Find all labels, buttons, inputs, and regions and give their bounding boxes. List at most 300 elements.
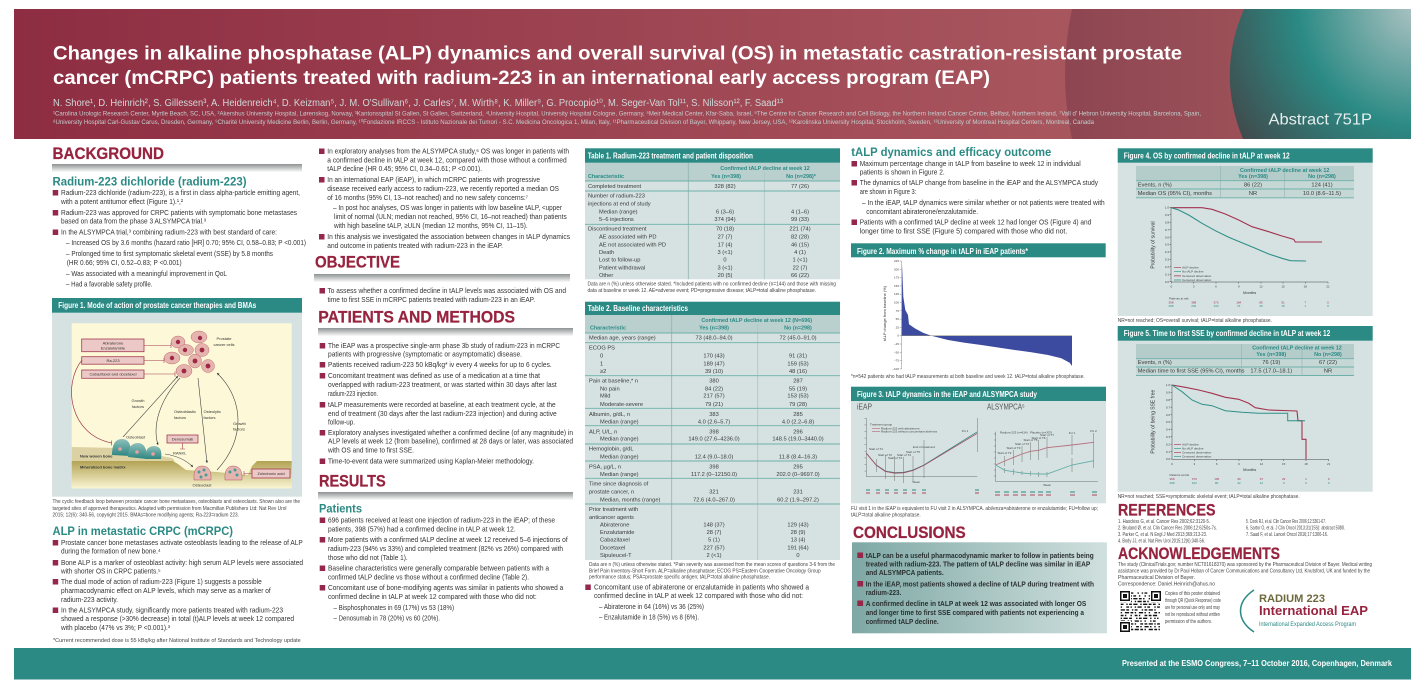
Kaplan-Meier chart: OS: 184 [1236,300,1242,304]
Kaplan-Meier chart: OS: 9 [1238,284,1240,288]
panel: table 1: injections at end of study [588,201,651,207]
section: radium-223 dichloride: – Had a favorable safety profile. [66,280,152,288]
panel: table 2: 28 (9) [791,530,806,536]
Kaplan-Meier chart: OS: 85 [1259,300,1263,304]
title [53,42,1182,89]
panel: table 2: 13 (4) [791,538,806,544]
diagram: bone and cancer feedback loop: Osteoblast [126,434,146,440]
section: tALP dynamics and efficacy outcome: Maximum percentage change in tALP from baseline to week 12 in individual [860,159,1081,168]
waterfall chart: 225 [894,259,899,263]
osteoclast cells [194,466,242,480]
Kaplan-Meier chart: OS: 0.8 [1165,220,1169,224]
diagram: bone and cancer feedback loop: factors [174,415,186,420]
section: radium-223 dichloride [52,176,306,288]
chart: iEAP: Radium-223 with abiraterone [881,426,920,430]
panel: table 2: 48 (16) [789,369,807,375]
section: radium-223 dichloride: – Increased OS by 3.6 months (hazard ratio [HR] 0.70; 95% CI, 0.58–0.83; P <0.001) [66,238,306,247]
panel: table 2: ECOG PS [589,345,615,351]
section: results: Baseline characteristics were generally comparable between patients with a [328,564,550,572]
diagram: bone and cancer feedback loop: Zoledronic acid [257,471,285,476]
chart: ALSYMPCA: Start of T3 [1007,446,1021,450]
panel: table 2: 159 (53) [787,361,809,367]
waterfall chart: 150 [894,284,899,288]
chart: iEAP: Week [912,480,920,484]
Kaplan-Meier chart: OS: 0.5 [1165,243,1169,247]
section: references: 7. Saad F, et al. Lancet Oncol 2016;17:1306-16. [1246,532,1328,538]
panel: table 2: 28 (7) [707,530,722,536]
table 1 title: Table 1. Radium-223 treatment and patient disposition [588,150,753,160]
Kaplan-Meier chart: OS: 0.0 [1165,280,1169,284]
section: objective [314,254,570,304]
section: objective: To assess whether a confirmed decline in tALP levels was associated with OS and [328,286,566,295]
panel: table 2: 231 [793,490,803,496]
panel: table 2: 295 [793,464,803,470]
figure 4 table: No (n=298) [1308,174,1336,180]
Kaplan-Meier chart: OS: 73 [1237,304,1241,308]
Kaplan-Meier chart: SSE: 379 [1192,477,1197,481]
figure 1 caption [52,499,300,518]
panel: table 2: 73 (48.0–94.0) [696,336,733,342]
panel: table 2: Pain at baseline,* n [589,378,638,384]
panel: table 1: 70 (18) [716,227,734,233]
conclusions box: confirmed tALP decline. [866,617,939,626]
header banner [14,9,1411,139]
Kaplan-Meier chart: OS: 134 [1213,304,1219,308]
Kaplan-Meier chart: OS: 0.6 [1165,235,1169,239]
panel: table 1: 374 (94) [714,217,736,223]
section: radium-223 dichloride: In the ALSYMPCA trial,³ combining radium-223 with best standard of care: [61,228,277,236]
panel: table 2: Abiraterone [600,523,629,529]
section: results: confirmed decline in tALP at week 12 compared with those who did not: [328,592,537,601]
Kaplan-Meier chart: SSE: 12 [1260,481,1263,485]
abstract number: Abstract 751P [1268,112,1372,128]
figure 4 table: 124 (41) [1311,182,1333,188]
Kaplan-Meier chart: SSE: 0.0 [1166,457,1170,461]
section: tALP dynamics and efficacy outcome: – In the iEAP, tALP dynamics were similar whether or not patients were treated with [862,198,1105,207]
panel: table 2: Mild [600,394,610,400]
diagram: bone and cancer feedback loop: Growth [233,421,246,426]
Kaplan-Meier chart: OS: 0 [1170,284,1172,288]
section: ALP in metastatic CRPC: Bone ALP is a marker of osteoblast activity: high serum ALP levels were associated [61,558,303,567]
panel: table 2: 296 [793,429,803,435]
section: radium-223 dichloride: (HR 0.66; 95% CI, 0.52–0.83; P <0.001) [67,258,182,267]
Kaplan-Meier chart: OS: Censored observation [1182,278,1212,282]
Kaplan-Meier chart: OS: 232 [1191,304,1197,308]
panel: figure 2 [851,243,1106,380]
chart: ALSYMPCA: Start of T7 [1040,433,1054,437]
text block: background continued: a confirmed decline in tALP at week 12, compared with those without a confirmed [327,156,567,164]
table 2 footnote: performance status; PSA=prostate specific antigen; tALP=total alkaline phosphatase. [589,574,770,580]
section: results: RESULTS [319,472,386,490]
waterfall chart: tALP change from baseline (%) [882,285,887,341]
waterfall chart: –75 [894,359,899,363]
section: results: More patients with a confirmed tALP decline at week 12 received 5–6 injections of [328,535,569,544]
chart: ALSYMPCA: Start of T2 [998,451,1012,455]
Kaplan-Meier chart: SSE: Censored observation [1182,455,1212,459]
heading: background [52,145,302,172]
section: acknowledgements: The study (ClinicalTrials.gov; number NCT01618370) was sponsored by the Pharmaceutical Division of Bayer. Medical writing [1118,562,1372,568]
section: radium-223 dichloride: with a potent antitumor effect (Figure 1).¹,² [60,197,184,206]
Kaplan-Meier chart: OS: 0 [1327,300,1329,304]
panel: table 2: 149.0 (27.6–4236.0) [688,437,740,443]
Kaplan-Meier chart: SSE: 1 [1305,477,1307,481]
section: patients and methods: end of treatment (30 days after the last radium-223 injection) and during active [328,409,557,418]
panel: table 2: 321 [709,490,719,496]
panel: table 1: 5–6 injections [599,217,634,223]
section: ALP in metastatic CRPC [52,526,303,632]
section: conclusions [852,524,1107,633]
Kaplan-Meier chart: OS: 0.7 [1165,228,1169,232]
text block: concomitant abiraterone or enzalutamide: – Abiraterone in 64 (16%) vs 36 (25%) [599,602,704,611]
figure 1 caption: targeted sites of approved therapeutics. Adapted with permission from Macmillan Publishers Ltd: Nat Rev Urol [52,506,286,512]
section: tALP dynamics and efficacy outcome: tALP dynamics and efficacy outcome [851,147,1051,159]
panel: table 1: Yes (n=398) [711,174,741,180]
panel: table 1: Discontinued treatment [588,227,647,233]
text block: background continued: of 16 months (95% CI, 13–not reached) and no new safety concerns:⁷ [327,193,528,202]
waterfall chart: –25 [894,342,899,346]
panel: table 2: Median (range) [600,454,639,460]
figure 5 table [1136,344,1354,376]
Kaplan-Meier chart: OS: Months [1243,290,1256,295]
figure 5 table: 76 (19) [1262,360,1280,366]
text block: concomitant abiraterone or enzalutamide [585,582,810,622]
panel: table 2: 287 [793,378,803,384]
Kaplan-Meier chart: OS: 0.3 [1165,258,1169,262]
Kaplan-Meier chart: SSE: 18 [1304,462,1308,466]
section: results: – Bisphosphonates in 69 (17%) vs 53 (18%) [334,603,454,612]
panel: table 2: Median (range) [600,472,639,478]
conclusions box: A confirmed decline in tALP at week 12 was associated with longer OS [866,599,1086,608]
panel: table 1: No (n=298)* [786,174,817,180]
section: ALP in metastatic CRPC: showed a response (>30% decrease) in total (t)ALP levels at week 12 compared [61,614,294,623]
diagram: bone and cancer feedback loop: Denosumab [172,437,194,442]
text block: QR note: Copies of this poster obtained [1165,591,1220,597]
waterfall chart: 75 [896,309,899,313]
authors: N. Shore¹, D. Heinrich², S. Gillessen³, A. Heidenreich⁴, D. Keizman⁵, J. M. O'Sullivan⁶, J. Carles⁷, M. Wirth⁸, K. Miller⁹, G. Procopio¹⁰, M. Seger-Van Tol¹¹, S. Nilsson¹², F. Saad¹³ [53,98,784,109]
chart: ALSYMPCA [987,402,1098,495]
panel: table 2: Median age, years (range) [589,336,656,342]
Kaplan-Meier chart: SSE: 0.5 [1166,420,1170,424]
Kaplan-Meier chart: SSE: 67 [1260,477,1263,481]
panel: table 2: 2 (<1) [706,553,722,559]
Kaplan-Meier chart: SSE: 105 [1214,477,1220,481]
text block: QR note: through QR (Quick Response) code [1165,598,1221,604]
panel: table 1: 3 (<1) [717,250,733,256]
chart: iEAP: End of treatment [913,445,935,449]
section: results [318,472,573,622]
table 2 title: Table 2. Baseline characteristics [588,303,688,313]
prostate cancer cells [164,331,214,378]
section: results: those who did not (Table 1). [328,553,408,562]
Kaplan-Meier chart: SSE: 0.3 [1166,435,1170,439]
section: references: 5. Cook RJ, et al. Clin Cancer Res 2006;12:3361-67. [1246,519,1326,525]
panel: table 2: 1 [600,361,603,367]
text block: background continued: In exploratory analyses from the ALSYMPCA study,⁶ OS was longer in patients with [327,146,569,156]
Kaplan-Meier chart: OS: 18 [1304,284,1307,288]
panel: table 1: 4 (1) [794,250,806,256]
text block: background continued [319,146,570,250]
section: tALP dynamics and efficacy outcome: are shown in Figure 3: [860,187,916,196]
panel: table 2: Yes (n=398) [699,326,729,332]
logo: Radium 223 International EAP [1240,590,1368,632]
chart: ALSYMPCA: ALSYMPCA⁶ [987,402,1025,412]
section: radium-223 dichloride: based on data from the phase 3 ALSYMPCA trial.³ [61,216,207,226]
panel: table 1: Death [599,250,614,256]
panel: table 2: 12.4 (9.0–18.0) [695,454,733,460]
panel: table 2: PSA, µg/L, n [589,464,621,470]
text block: QR note: not be reproduced without written [1165,612,1220,618]
text block: background continued: limit of normal (ULN; median not reached, 95% CI, 16–not reached) than patients [334,212,567,221]
Kaplan-Meier chart: OS: Patients at risk [1169,296,1189,300]
panel: figure 3 [851,387,1106,503]
section: tALP dynamics and efficacy outcome: longer time to first SSE (Figure 5) compared with those who did not. [860,226,1067,236]
Kaplan-Meier chart: SSE: 96 [1237,477,1241,481]
chart: iEAP: Start of T5 [906,450,920,454]
section: ALP in metastatic CRPC: The dual mode of action of radium-223 (Figure 1) suggests a possible [61,577,262,586]
Kaplan-Meier chart: OS: 51 [1281,300,1285,304]
section: radium-223 dichloride: Radium-223 dichloride (radium-223) [52,176,247,188]
diagram: bone and cancer feedback loop: Ra-223 [106,358,120,363]
Kaplan-Meier chart: OS: Probability of survival [1150,221,1156,269]
Kaplan-Meier chart: SSE: 162 [1192,481,1197,485]
section: acknowledgements [1118,545,1372,588]
figure 4 table: Median OS (95% CI), months [1138,191,1212,197]
panel: table 1: 6 (3–6) [716,209,734,215]
section: patients and methods: follow-up. [328,418,355,426]
Kaplan-Meier chart: SSE [1150,383,1331,485]
section: patients and methods: PATIENTS AND METHODS [318,308,515,326]
section: acknowledgements: assistance was provided by Dr Paul Hoban of Cancer Communications and Consultancy Ltd, Knutsford, UK and funded by the [1118,568,1370,574]
panel: table 1: 1 (<1) [792,258,808,264]
section: patients and methods: overlapped with radium-223 treatment, or was started within 30 days after last [328,380,557,389]
panel: table 1: 0 [723,258,727,264]
figure 5 table: Median time to first SSE (95% CI), months [1138,369,1245,375]
panel: table 2: Time since diagnosis of [589,482,649,488]
panel: table 2: 129 (43) [787,523,809,529]
figure 4 table [1136,166,1354,198]
figure 5 footnote: NR=not reached; SSE=symptomatic skeletal event; tALP=total alkaline phosphatase. [1118,494,1300,500]
Kaplan-Meier chart: SSE: 0 [1328,477,1330,481]
heading: background: BACKGROUND [52,145,164,163]
Kaplan-Meier chart: OS: 0.4 [1165,250,1169,254]
panel: table 2: ≥2 [600,369,606,375]
section: results: 696 patients received at least one injection of radium-223 in the iEAP; of these [328,516,555,524]
panel: table 2: 72.6 (4.0–267.0) [693,497,735,503]
figure 4 table: Yes (n=398) [1238,174,1268,180]
Kaplan-Meier chart: OS: 373 [1213,300,1219,304]
Kaplan-Meier chart: OS: 0.2 [1165,265,1169,269]
text block: background continued: – In post hoc analyses, OS was longer in patients with low baseline tALP, <upper [333,203,562,212]
panel: table 1 [585,148,840,279]
chart: ALSYMPCA: Start of T4 [1015,442,1029,446]
footer bar [14,648,1411,680]
section: ALP in metastatic CRPC: during the formation of new bone.⁴ [61,546,161,556]
Kaplan-Meier chart: SSE: 12 [1260,462,1263,466]
panel: figure 5 [1118,326,1373,492]
section: patients and methods: The iEAP was a prospective single-arm phase 3b study of radium-223 in mCRPC [328,341,560,350]
text block: concomitant abiraterone or enzalutamide: Concomitant use of abiraterone or enzalutamide in patients who showed a [594,582,810,592]
section: patients and methods: with OS and time to first SSE. [327,446,414,454]
panel: table 2: 72 (45.0–91.0) [780,336,817,342]
figure 5 table: No (n=298) [1314,352,1342,358]
text block: QR note: are for personal use only and may [1165,605,1220,611]
section: ALP in metastatic CRPC: with shorter OS in CRPC patients.⁵ [60,566,161,576]
figure 4 table: 10.0 (8.6–11.5) [1303,191,1341,197]
diagram: bone and cancer feedback loop: Enzalutamide [101,346,126,351]
panel: table 2: anticancer agents [589,515,634,521]
table 2 footnote: Data are n (%) unless otherwise stated. *Pain severity was assessed from the mean scores of questions 3-6 from the [589,562,835,568]
chart: ALSYMPCA: FU 2 [1090,429,1097,433]
section: patients and methods [318,308,573,466]
waterfall chart: 200 [894,267,899,271]
Kaplan-Meier chart: SSE: No tALP decline [1182,447,1204,451]
chart: ALSYMPCA: Radium-223 (n=614) [1000,430,1028,434]
text block: concomitant abiraterone or enzalutamide: confirmed decline in tALP at week 12 compared with those who did not: [594,591,803,600]
chart: ALSYMPCA: Start of T6 [1032,436,1046,440]
Kaplan-Meier chart: SSE: 0.6 [1166,413,1170,417]
figure 2 footnote: *n=542 patients who had tALP measurements at both baseline and week 12. tALP=total alkaline phosphatase. [851,374,1085,380]
figure 4 table: Events, n (%) [1138,182,1172,188]
section: radium-223 dichloride: Radium-223 dichloride (radium-223), is a first in class alpha-particle emitting agent, [61,188,300,197]
panel: table 2: 39 (10) [705,369,723,375]
chart: iEAP: Treatment group [870,422,892,426]
panel: table 2: Median (range) [600,437,639,443]
section: ALP in metastatic CRPC: ALP in metastatic CRPC (mCRPC) [52,526,233,538]
panel: table 2: Confirmed tALP decline at week 12 (N=696) [701,318,812,324]
section: patients and methods: radium-223 injection. [328,389,378,398]
table 1 footnote: data at baseline or week 12. AE=adverse event; PD=progressive disease; tALP=total alkaline phosphatase. [588,288,816,294]
chart: iEAP [857,402,979,493]
chart: iEAP: iEAP [857,402,872,412]
text block: background continued: In this analysis we investigated the association between changes in tALP dynamics [327,232,570,241]
diagram: bone and cancer feedback loop: Osteoclast [193,482,212,488]
diagram: bone and cancer feedback loop: Osteoblastic [174,409,196,414]
Kaplan-Meier chart: SSE: 0 [1328,481,1330,485]
diagram: bone and cancer feedback loop: factors [132,404,144,409]
panel: table 1: 17 (4) [718,242,733,248]
section: objective: OBJECTIVE [315,254,400,272]
Kaplan-Meier chart: SSE: 29 [1282,477,1286,481]
affiliations: ⁸University Hospital Carl-Gustav Carus, Dresden, Germany, ⁹Charité University Medicine Berlin, Berlin, Germany, ¹⁰Fondazione IRCCS - Istituto Nazionale dei Tumori - S.C. Medicina Oncologica 1, Milan, Italy, ¹¹Pharmaceutical Division of Bayer, Whippany, New Jersey, USA, ¹²Karolinska University Hospital, Stockholm, Sweden, ¹³University of Montreal Hospital Centers, Montreal, Canada [53,119,1094,126]
Kaplan-Meier chart: SSE: Probability of being SSE free [1150,390,1156,454]
arrows between cells [123,373,238,470]
Kaplan-Meier chart: OS: 1.0 [1165,206,1169,210]
section: tALP dynamics and efficacy outcome: concomitant abiraterone/enzalutamide. [866,207,978,216]
figure 1 title: Figure 1. Mode of action of prostate cancer therapies and BMAs [58,300,256,310]
section: ALP in metastatic CRPC: pharmacodynamic effect on ALP levels, which may serve as a marker of [61,586,272,595]
Kaplan-Meier chart: SSE: Patients at risk [1170,473,1190,477]
table 2 footnote: Brief Pain Inventory-Short Form. ALP=alkaline phosphatase; ECOG PS=Eastern Cooperative Oncology Group [589,568,821,574]
Kaplan-Meier chart: SSE: 15 [1282,462,1286,466]
waterfall chart: 25 [896,325,899,329]
panel: table 2: 285 [793,412,803,418]
panel: table 2 [585,302,840,560]
osteoblast cells [112,439,161,459]
figure 4 table: 86 (22) [1244,182,1262,188]
section: radium-223 dichloride: – Was associated with a meaningful improvement in QoL [66,269,227,278]
text block: concomitant abiraterone or enzalutamide: – Enzalutamide in 18 (5%) vs 8 (6%). [599,612,699,622]
section: references: 4. Body JJ, et al. Nat Rev Urol 2015;12(6):340-56. [1118,538,1205,544]
panel: table 1: Lost to follow-up [599,258,640,264]
section: tALP dynamics and efficacy outcome [851,147,1105,236]
section: references [1118,502,1345,544]
section: ALP in metastatic CRPC: radium-223 activity. [61,595,118,604]
Kaplan-Meier chart: OS: tALP decline [1182,265,1199,269]
figure 4 footnote: NR=not reached; OS=overall survival; tALP=total alkaline phosphatase. [1118,318,1272,324]
section: patients and methods: tALP measurements were recorded at baseline, at each treatment cycle, at the [328,400,556,409]
section: acknowledgements: Pharmaceutical Division of Bayer. [1118,575,1195,581]
section: ALP in metastatic CRPC: with placebo (47% vs 3%; P <0.001).³ [60,623,171,632]
panel: table 1: Confirmed tALP decline at week 12 [720,166,810,172]
chart: ALSYMPCA: Week [1043,483,1051,487]
diagram: bone and cancer feedback loop: New woven bone [80,454,113,458]
Kaplan-Meier chart: SSE: 6 [1216,462,1218,466]
section: references: 6. Sartor O, et al. J Clin Oncol 2013;31(15S): abstract 5080. [1246,526,1345,532]
title: cancer (mCRPC) patients treated with radium-223 in an international early access program (EAP) [53,67,990,89]
section: results: Concomitant use of bone-modifying agents was similar in patients who showed a [328,583,564,592]
Kaplan-Meier chart: SSE: 80 [1215,481,1219,485]
icon: QR code [1120,591,1161,632]
panel: table 2: 153 (53) [787,394,809,400]
Kaplan-Meier chart: SSE: 3 [1193,462,1195,466]
panel: table 2: 148.5 (19.0–3440.0) [772,437,824,443]
panel: table 2: 79 (21) [705,402,723,408]
figure 1 caption: 2015; 12(6): 340-56, copyright 2015. BMAs=bone modifying agents; Ra-223=radium 223. [52,512,239,518]
panel: table 1: 4 (1–6) [791,209,809,215]
Kaplan-Meier chart: OS: 398 [1168,300,1174,304]
logo: Radium 223 International EAP: International EAP [1259,604,1368,618]
panel: table 2: Hemoglobin, g/dL [589,447,634,453]
diagram: bone and cancer feedback loop: Osteolytic [204,409,221,414]
Kaplan-Meier chart: SSE: 32 [1237,481,1241,485]
panel: table 2: Albumin, g/dL, n [589,412,630,418]
section: tALP dynamics and efficacy outcome: The dynamics of tALP change from baseline in the iEAP and the ALSYMPCA study [860,178,1098,187]
Kaplan-Meier chart: SSE: 298 [1169,481,1175,485]
panel: table 2: No (n=298) [784,326,812,332]
panel: table 1: Completed treatment [588,184,642,190]
Kaplan-Meier chart: OS: 0.9 [1165,213,1169,217]
panel: table 2: 5 (1) [708,538,720,544]
Kaplan-Meier chart: SSE: 0.2 [1166,442,1170,446]
panel: figure 1 [52,298,302,497]
section: conclusions: CONCLUSIONS [853,524,966,542]
text block: background continued: and outcome in patients treated with radium-223 in the iEAP. [327,241,503,250]
section: results: patients, 398 (57%) had a confirmed decline in tALP at week 12. [328,524,516,534]
panel: table 2: 398 [709,464,719,470]
section: references: 1. Hasckiss G, et al. Cancer Res 2002;62:3120-5. [1118,519,1210,525]
panel: table 2: Median, months (range) [600,497,660,503]
panel: table 2: 60.2 (1.9–297.2) [777,497,819,503]
conclusions box: In the iEAP, most patients showed a decline of tALP during treatment with [866,580,1094,588]
diagram: bone and cancer feedback loop: Cabazitaxel and docetaxel [90,372,137,376]
panel: table 2: prostate cancer, n [589,490,634,496]
chart: iEAP: Start of T1 [869,447,883,451]
panel: table 2: 84 (22) [705,387,723,393]
Kaplan-Meier chart: OS: 21 [1326,284,1330,288]
section: patients and methods: patients with progressive (symptomatic or asymptomatic) disease. [328,350,522,358]
Kaplan-Meier chart: OS: 388 [1191,300,1197,304]
Kaplan-Meier chart: SSE: 0.9 [1166,391,1170,395]
panel: table 2: 383 [709,412,719,418]
section: objective: time to first SSE in mCRPC patients treated with radium-223 in an iEAP. [328,295,535,304]
waterfall chart: 50 [896,317,899,321]
Kaplan-Meier chart: OS: 15 [1281,284,1285,288]
Kaplan-Meier chart: SSE: 0.7 [1166,405,1170,409]
waterfall chart [882,259,1072,371]
affiliations [53,110,1201,126]
Kaplan-Meier chart: SSE: 1.0 [1166,383,1170,387]
figure 4 title: Figure 4. OS by confirmed decline in tALP at week 12 [1124,150,1290,160]
